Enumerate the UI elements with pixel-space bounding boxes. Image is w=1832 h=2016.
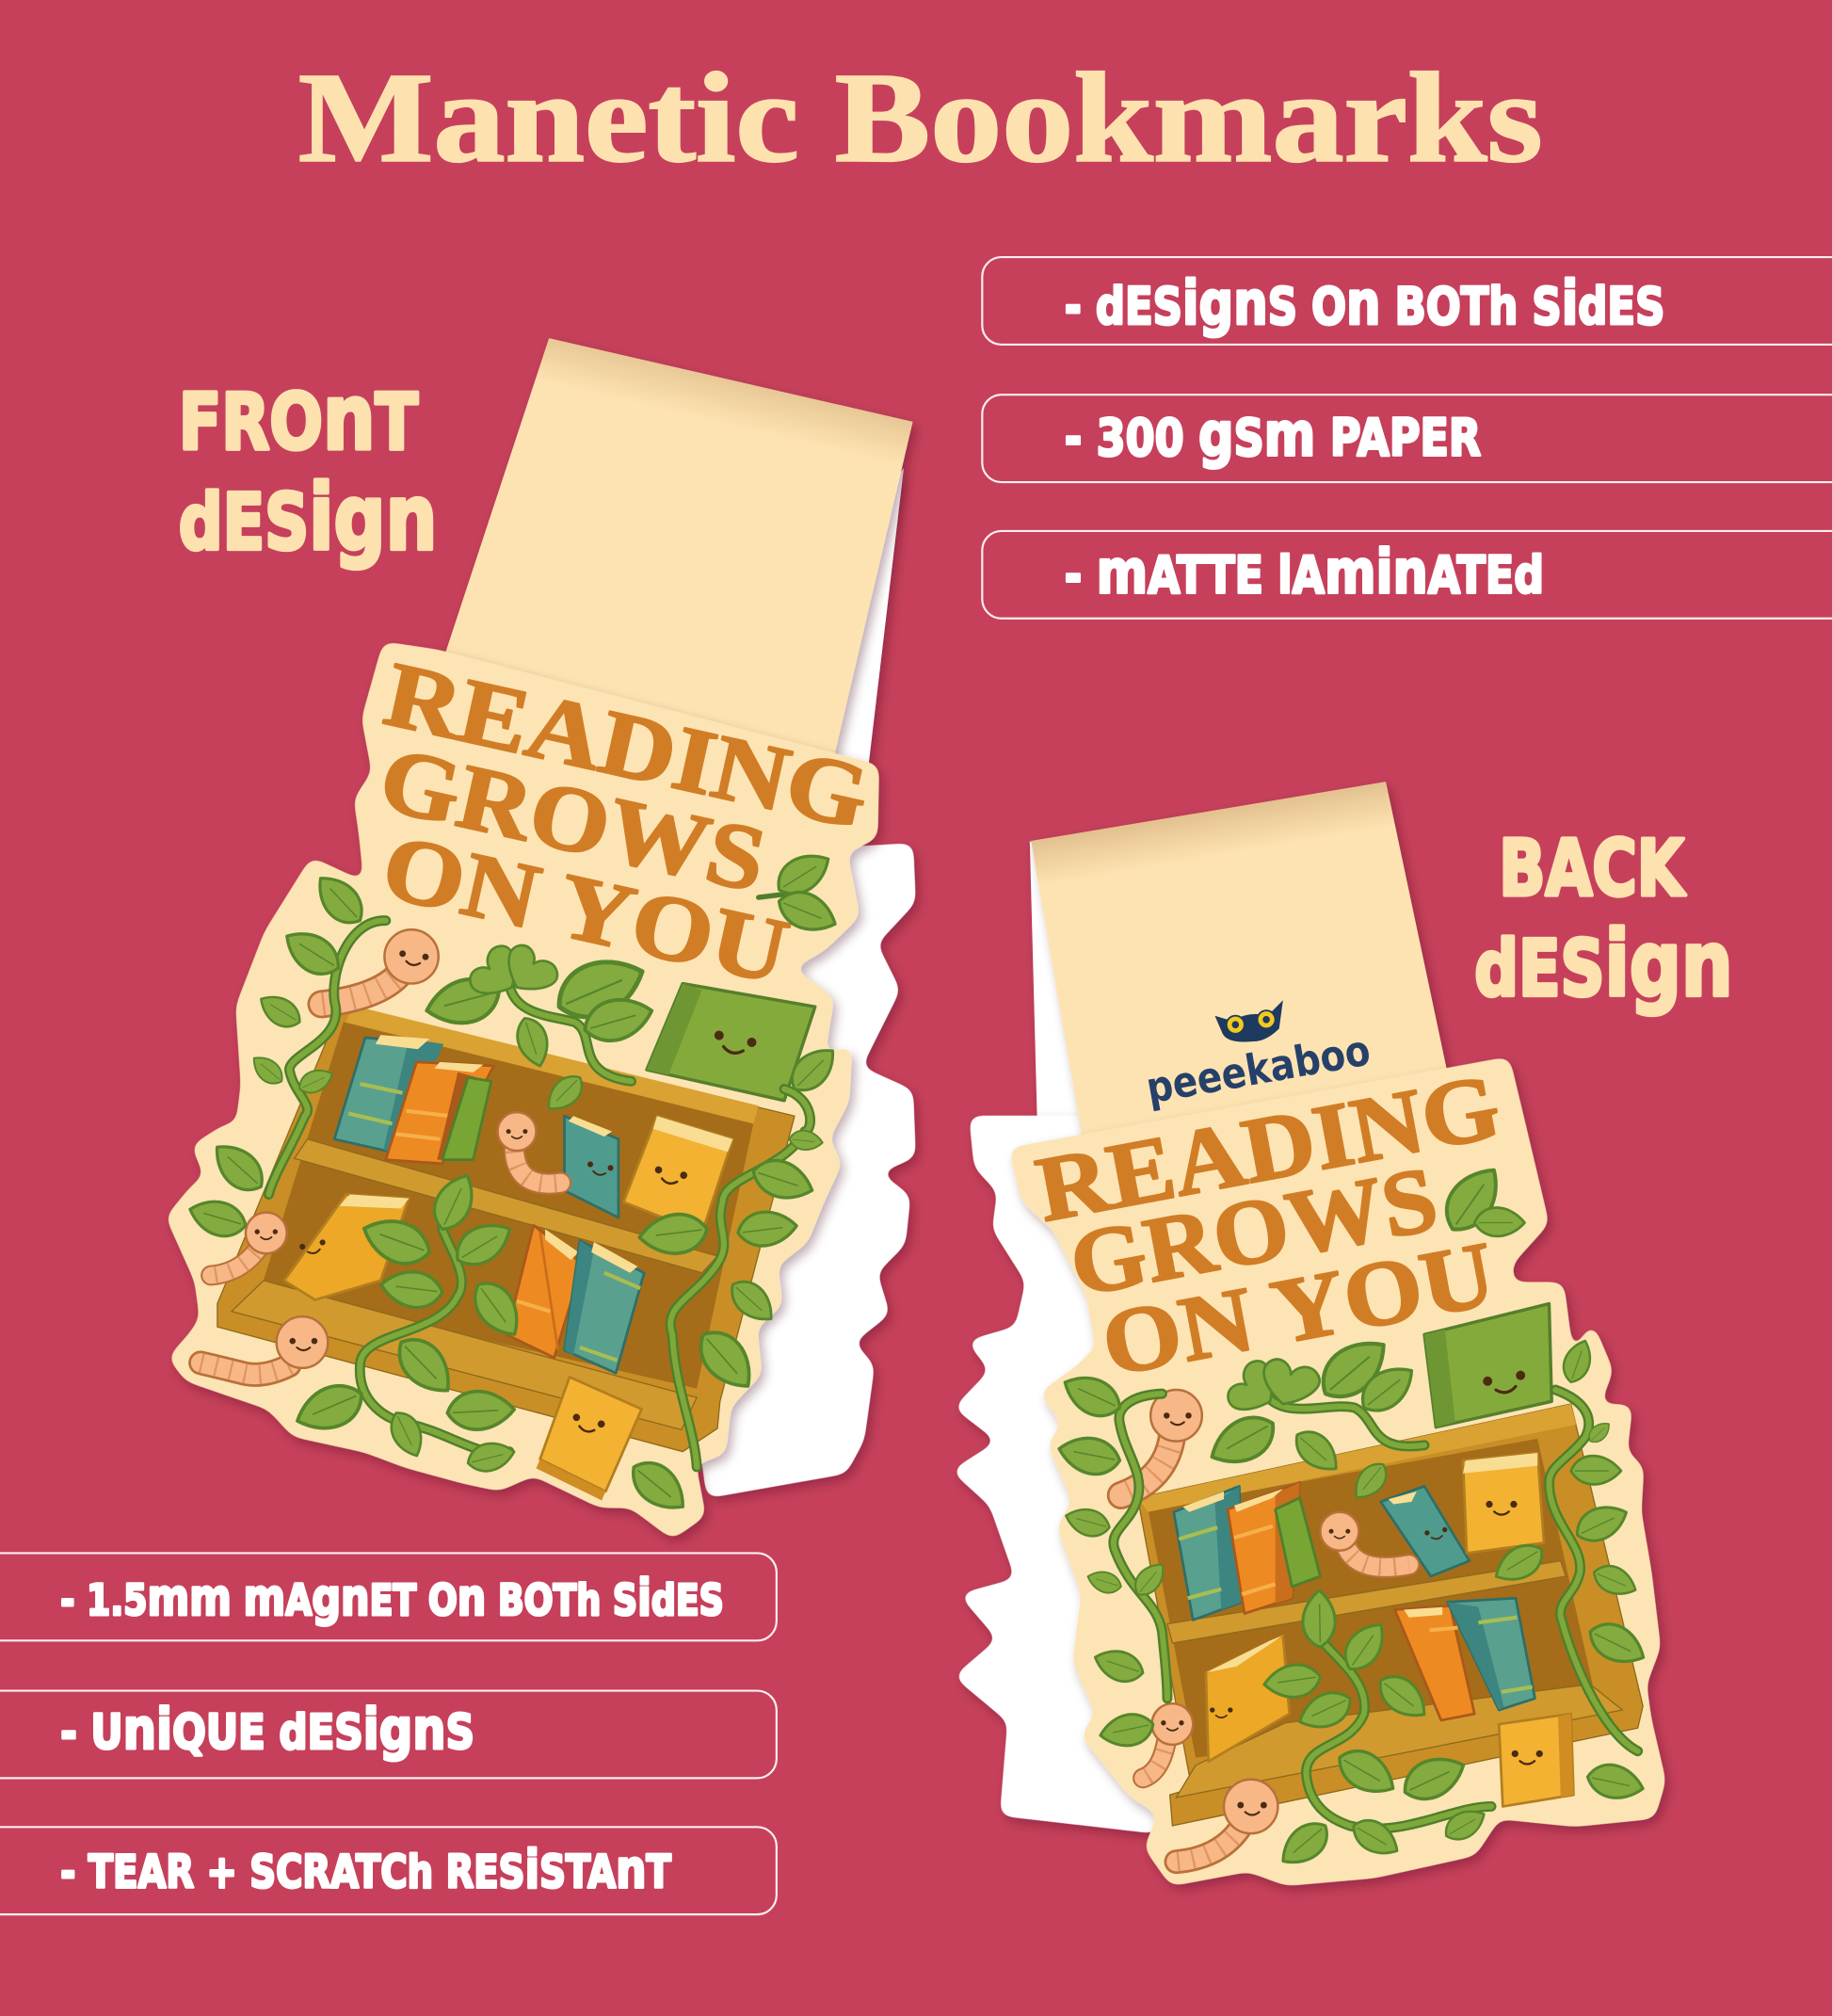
slogan: front (371, 642, 877, 1004)
faces on books: front (299, 1030, 757, 1436)
sticker: front (169, 645, 876, 1535)
feature pill: unique designs (0, 1691, 777, 1778)
panel: back bookmark (952, 782, 1663, 1882)
icon: owl (1214, 1000, 1283, 1042)
feature pill: matte laminated (982, 531, 1832, 619)
feature pill: unique designs: - UniQUE dESignS (60, 1698, 474, 1763)
feature pill: designs on both sides: - dESignS On BOTh SidES (1065, 268, 1664, 339)
white strip: back (1030, 841, 1105, 1144)
logo: peeekaboo: peeekaboo (1143, 1024, 1374, 1113)
paper tab: front (425, 338, 913, 816)
heading: back design: BACK (1499, 824, 1686, 913)
heading: front design (179, 364, 437, 571)
vines: front (269, 893, 811, 1467)
paper tab: back (1031, 782, 1459, 1196)
bookshelf: back (1138, 1404, 1643, 1826)
feature list: bottom left (0, 1553, 777, 1914)
heading: back design (1474, 824, 1733, 1017)
slogan: front: GROWS (371, 728, 775, 912)
worms: front (201, 929, 560, 1375)
leaves: front (185, 845, 843, 1520)
panel: front bookmark (169, 338, 915, 1535)
bookshelf: front (217, 1006, 795, 1452)
feature pill: designs on both sides (982, 257, 1832, 345)
slogan: back: ON YOU (1094, 1222, 1503, 1396)
vines: back (1114, 1390, 1638, 1829)
feature pill: magnet: - 1.5mm mAgnET On BOTh SidES (60, 1569, 724, 1627)
heading: front design: FROnT (179, 364, 418, 471)
white strip: front (771, 468, 904, 823)
white backing: front (643, 844, 915, 1498)
feature pill: tear and scratch resistant (0, 1827, 777, 1914)
heading: front design: dESign (179, 464, 437, 571)
title: Manetic Bookmarks (298, 46, 1543, 189)
feature list: top right (982, 257, 1832, 619)
feature pill: 300 gsm paper (982, 395, 1832, 482)
slogan: back: READING (1029, 1055, 1507, 1242)
slogan: back: GROWS (1062, 1148, 1445, 1316)
heading: back design: dESign (1474, 911, 1733, 1017)
feature pill: matte laminated: - mATTE lAminATEd (1065, 537, 1544, 607)
leaves: back (1055, 1158, 1651, 1874)
white backing: back (952, 1116, 1221, 1833)
slogan: front: READING (377, 642, 877, 849)
sticker: back (1013, 1060, 1663, 1882)
slogan: front: ON YOU (374, 814, 797, 1004)
books: front (284, 984, 815, 1500)
feature pill: 300 gsm paper: - 300 gSm PAPER (1065, 399, 1481, 470)
slogan: back (1029, 1055, 1507, 1396)
faces on books: back (1210, 1370, 1543, 1764)
feature pill: magnet (0, 1553, 777, 1640)
feature pill: tear and scratch resistant: - TEAR + SCRATCh RESiSTAnT (60, 1839, 671, 1900)
books: back (1174, 1304, 1573, 1806)
worms: back (1121, 1390, 1409, 1862)
